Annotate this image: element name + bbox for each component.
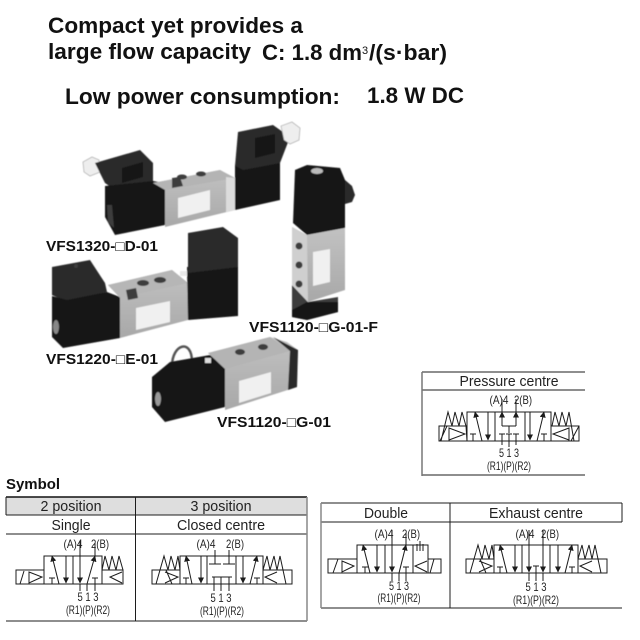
port labels: 2(B) xyxy=(402,527,420,541)
port labels: (A)4 xyxy=(196,537,216,551)
port labels: 2(B) xyxy=(514,393,532,407)
port labels: 5 1 3 xyxy=(389,579,409,593)
header: 2 position: 2 position xyxy=(40,499,102,515)
label: VFS1220: VFS1220-□E-01 xyxy=(46,352,158,368)
port labels: 5 1 3 xyxy=(499,446,519,460)
symbol: double valve xyxy=(328,530,441,581)
label: VFS1120-G-01: VFS1120-□G-01 xyxy=(217,415,331,431)
product photo: VFS1220 valve xyxy=(52,227,238,348)
port labels: (R1)(P)(R2) xyxy=(513,593,559,607)
label: VFS1320: VFS1320-□D-01 xyxy=(46,239,158,255)
port labels: 2(B) xyxy=(541,527,559,541)
port labels: (R1)(P)(R2) xyxy=(487,459,531,473)
symbol: closed centre valve xyxy=(152,550,292,591)
panel: pressure centre xyxy=(422,372,585,476)
port labels: (R1)(P)(R2) xyxy=(200,604,244,618)
header: double: Double xyxy=(364,506,408,522)
heading: power consumption: Low power consumption: xyxy=(65,84,340,109)
symbol: exhaust centre valve xyxy=(466,530,607,581)
heading: flow capacity: 3 xyxy=(362,45,368,57)
port labels xyxy=(64,537,110,617)
panel: symbol table right xyxy=(321,503,622,608)
port labels: (A)4 xyxy=(64,537,83,551)
port labels xyxy=(374,527,420,605)
heading: flow capacity: large flow capacity xyxy=(48,39,252,64)
port labels: 2(B) xyxy=(91,537,109,551)
heading: flow capacity: /(s·bar) xyxy=(369,40,447,65)
port labels: (A)4 xyxy=(516,527,535,541)
port labels: 5 1 3 xyxy=(210,591,232,605)
heading: flow capacity xyxy=(48,13,447,65)
port labels: (R1)(P)(R2) xyxy=(378,591,420,605)
heading: flow capacity: Compact yet provides a xyxy=(48,13,304,38)
header: closed centre: Closed centre xyxy=(177,518,265,534)
product photo: VFS1120 valve xyxy=(152,337,298,422)
port labels: 2(B) xyxy=(226,537,244,551)
heading: pressure centre: Pressure centre xyxy=(460,374,558,390)
port labels xyxy=(513,527,559,607)
heading: power consumption xyxy=(65,83,464,109)
heading: flow capacity: C: 1.8 dm xyxy=(262,40,362,65)
heading: symbol: Symbol xyxy=(6,477,60,493)
product photo: VFS1120 vertical valve xyxy=(292,165,355,320)
header: single: Single xyxy=(52,518,90,534)
symbol: pressure centre valve xyxy=(439,399,579,447)
port labels: (A)4 xyxy=(374,527,394,541)
heading: power consumption: 1.8 W DC xyxy=(367,83,464,108)
port labels: (R1)(P)(R2) xyxy=(66,603,110,617)
symbol: single valve xyxy=(16,541,123,591)
panel: symbol table left xyxy=(6,497,307,621)
header: exhaust centre: Exhaust centre xyxy=(489,506,583,522)
product photo: VFS1320 valve xyxy=(83,122,300,235)
port labels: 5 1 3 xyxy=(78,590,99,604)
port labels: (A)4 xyxy=(490,393,509,407)
port labels xyxy=(487,393,532,473)
port labels: 5 1 3 xyxy=(526,580,547,594)
label: VFS1120-G-01-F: VFS1120-□G-01-F xyxy=(249,320,378,336)
header: 3 position: 3 position xyxy=(190,499,252,515)
port labels xyxy=(196,537,244,618)
